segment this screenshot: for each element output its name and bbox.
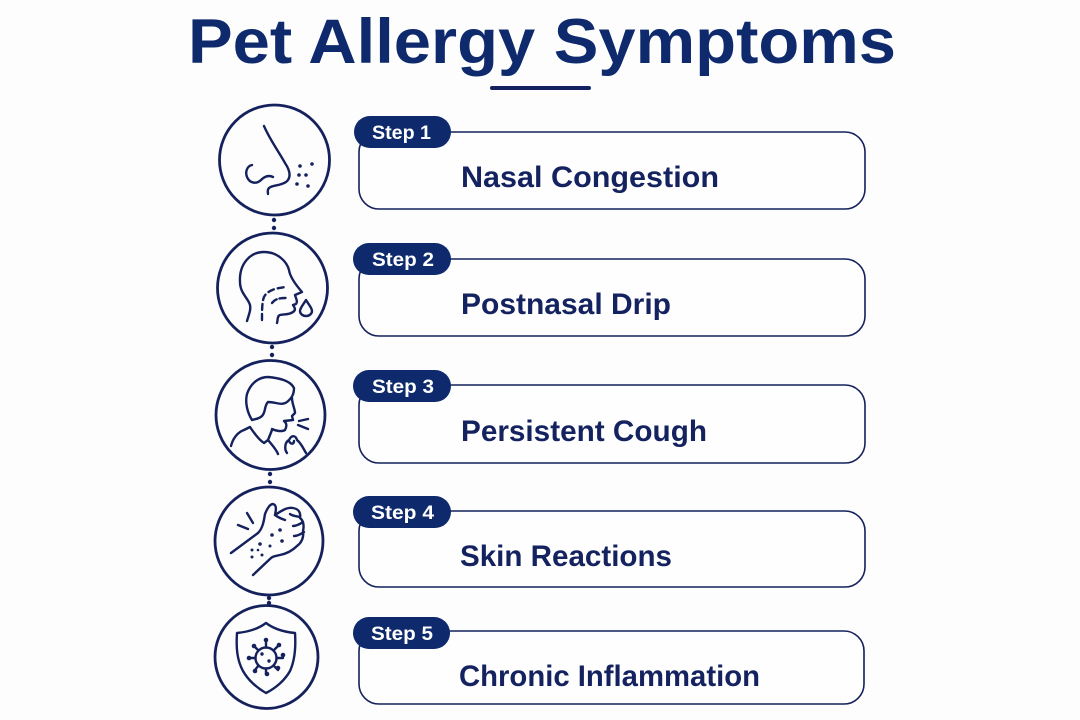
icon: hand with rash <box>215 487 323 595</box>
panel: step 4: Step 4 <box>371 503 434 524</box>
icon: shield with virus <box>215 606 318 708</box>
panel: step 2 <box>353 243 865 336</box>
panel: step 3: Step 3 <box>372 377 434 398</box>
connector dots between icons <box>267 218 276 605</box>
panel: step 1: Nasal Congestion <box>461 161 719 194</box>
icon: head profile with drip <box>218 233 328 343</box>
panel: step 3: Persistent Cough <box>461 415 707 448</box>
panel: step 2: Postnasal Drip <box>461 288 671 321</box>
panel: step 4: Skin Reactions <box>460 540 672 573</box>
panel: step 1: Step 1 <box>372 123 431 144</box>
panel: step 5: Step 5 <box>371 624 433 645</box>
panel: step 5: Chronic Inflammation <box>459 660 760 693</box>
title: Pet Allergy Symptoms <box>188 7 896 77</box>
icon: nose with particles <box>220 105 330 215</box>
panel: step 5 <box>353 617 864 704</box>
panel: step 3 <box>353 370 865 463</box>
panel: step 4 <box>353 496 865 587</box>
panel: step 1 <box>354 116 865 209</box>
icon: person coughing <box>216 360 325 470</box>
panel: step 2: Step 2 <box>372 250 434 271</box>
title underline <box>490 86 591 90</box>
